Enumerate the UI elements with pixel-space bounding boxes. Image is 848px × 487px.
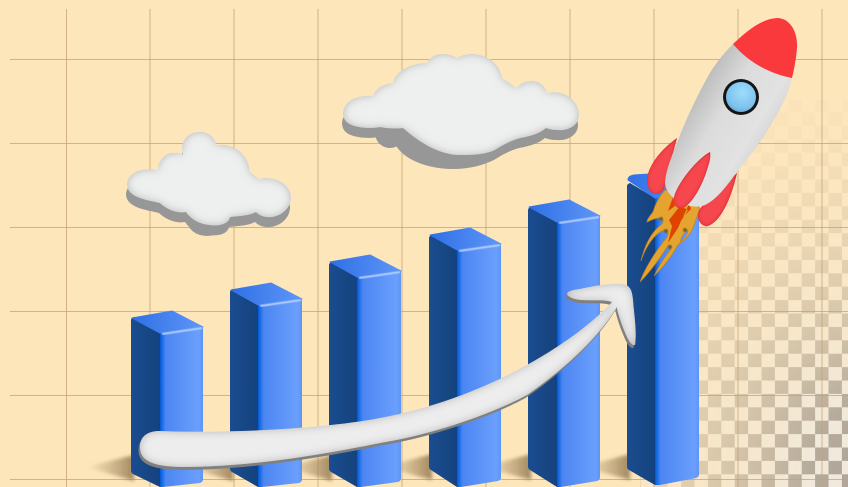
bar 1	[131, 311, 203, 487]
rocket nose cone	[733, 18, 797, 78]
bar 6	[627, 174, 699, 485]
bar 4	[429, 228, 501, 487]
rocket body	[665, 44, 792, 207]
rocket centre fin	[674, 152, 710, 209]
rocket	[640, 18, 797, 282]
rocket flame	[640, 190, 700, 282]
rocket left fin	[647, 138, 677, 194]
rocket right fin	[698, 173, 737, 226]
bar 2	[230, 283, 302, 487]
cloud: small left	[126, 132, 291, 236]
bar 5	[528, 200, 600, 487]
growth arrow	[138, 284, 636, 470]
transparency checkerboard	[640, 151, 848, 487]
bar 3	[329, 255, 401, 487]
bar shadows	[86, 454, 630, 481]
cloud: large centre	[342, 54, 579, 169]
rocket window	[723, 79, 759, 115]
